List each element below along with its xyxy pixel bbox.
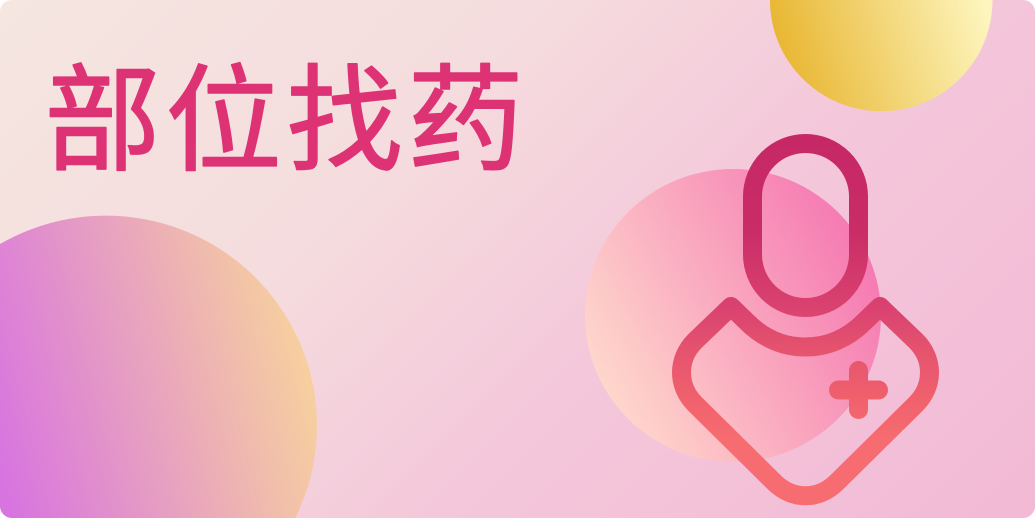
circle: pink xyxy=(585,169,881,462)
icon: finger with medical plus xyxy=(682,144,930,496)
title: 部位找药 xyxy=(44,27,528,195)
icon: plus xyxy=(838,370,878,410)
circle: purple xyxy=(0,216,317,518)
icon: capsule xyxy=(752,144,858,308)
icon: body xyxy=(682,306,930,496)
circle: yellow xyxy=(770,0,992,111)
